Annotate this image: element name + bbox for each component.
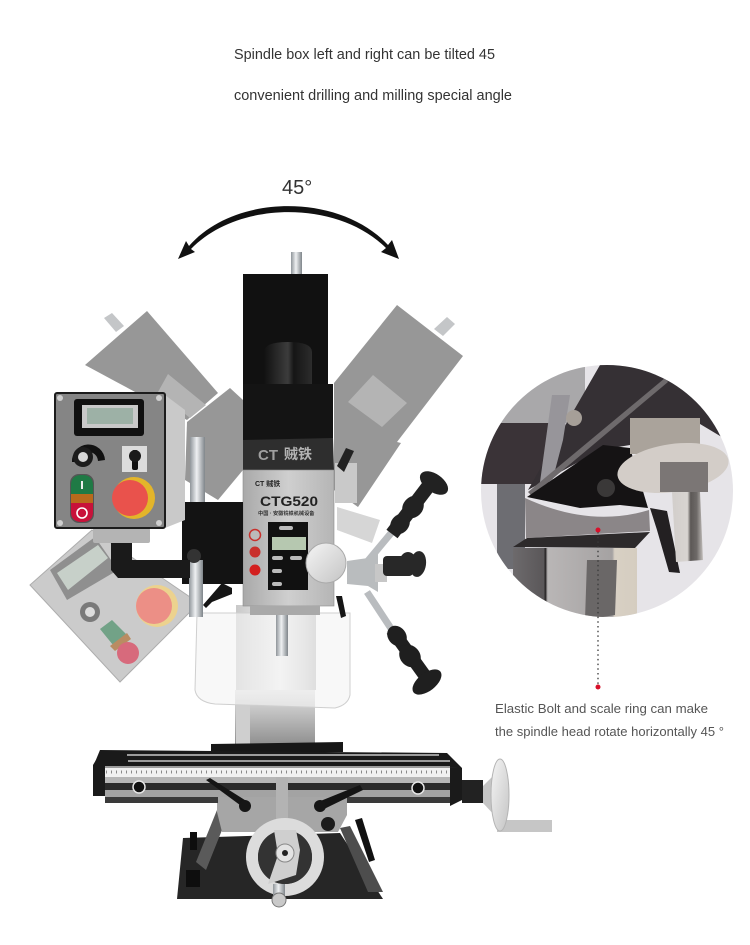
- display bezel: [74, 399, 144, 436]
- box corner screws: [57, 395, 162, 526]
- t slots: [105, 754, 450, 768]
- saddle: [217, 797, 347, 832]
- ghost control box tilted: [30, 530, 192, 682]
- saddle bolt: [321, 817, 335, 831]
- left lever knob: [239, 800, 251, 812]
- heading text: [234, 47, 512, 104]
- left end cap: [93, 752, 105, 796]
- left column strip: [497, 484, 525, 569]
- table stop bolts: [133, 781, 424, 794]
- cross table and base: [93, 742, 552, 907]
- glossy cylinder: [264, 342, 312, 384]
- dark recess: [527, 445, 648, 508]
- table top block: [211, 742, 343, 752]
- table front groove: [105, 783, 450, 790]
- display screen: [87, 408, 133, 424]
- caption line 1: Elastic Bolt and scale ring can make: [495, 701, 708, 716]
- spindle tool: [276, 615, 288, 656]
- logo text: 贼铁: [284, 446, 312, 462]
- start stop button: [70, 474, 94, 523]
- plate bottom collar: [250, 606, 320, 615]
- ghost orange button: [110, 633, 131, 651]
- diagonal light edge: [528, 378, 668, 496]
- silver head clamp: [335, 463, 357, 503]
- ghost left cylinder: [158, 374, 206, 418]
- left locking lever: [206, 778, 248, 808]
- model subtitle: 中国 · 安徽铣铁机械设备: [258, 509, 315, 517]
- side shaft: [462, 780, 483, 803]
- model name: CTG520: [260, 494, 318, 509]
- column scale strip: [236, 700, 250, 745]
- right lever knob: [314, 800, 326, 812]
- circular detail photo: [480, 365, 735, 620]
- dark head body: [528, 365, 735, 490]
- spindle collar: [630, 418, 700, 454]
- warning icons: [250, 530, 260, 576]
- hex bolt: [566, 410, 582, 426]
- ghost left top rod: [104, 313, 124, 332]
- base plate: [177, 833, 383, 899]
- left dovetail: [196, 810, 226, 870]
- table bottom: [105, 797, 218, 803]
- angle label 45 degrees: 45°: [282, 177, 312, 199]
- vertical side rod lower: [189, 560, 203, 617]
- ghost right cylinder: [348, 375, 407, 427]
- scale disc: [617, 443, 728, 493]
- middle handle: [383, 550, 428, 578]
- dotted leader: [597, 532, 599, 684]
- right dovetail: [340, 826, 383, 892]
- lower black housing: [243, 384, 333, 440]
- upper light strip: [501, 367, 585, 423]
- left base bolts: [186, 832, 200, 887]
- right small lever: [337, 448, 354, 472]
- display frame: [82, 405, 138, 428]
- arrow: curved double-headed tilt arrow: [178, 206, 399, 259]
- ghost green button: [100, 620, 126, 645]
- logo text: CT: [258, 447, 278, 464]
- photo background: [480, 365, 734, 618]
- control box side: [165, 395, 185, 528]
- right end cap: [450, 768, 462, 806]
- lock lever: [650, 508, 680, 573]
- ghost box body: [30, 530, 192, 682]
- curved scale block: [525, 498, 650, 538]
- side rod knob: [187, 549, 201, 563]
- digital panel screen: [272, 537, 306, 550]
- vertical side rod upper: [190, 437, 205, 502]
- upper lever arm: [367, 532, 392, 562]
- table bottom right: [347, 797, 450, 803]
- top red dot: [596, 528, 600, 532]
- ghost spindle head tilted left: [85, 311, 243, 500]
- dark upper left wall: [480, 423, 552, 484]
- lower handle: [383, 622, 446, 700]
- ghost red button: [117, 642, 139, 664]
- table center bracket: [276, 777, 288, 826]
- right locking lever: [318, 785, 363, 810]
- control box swivel base: [93, 528, 150, 543]
- lever under plate left: [203, 583, 232, 608]
- stainless control plate: [243, 470, 334, 606]
- ghost display screen: [57, 545, 108, 590]
- bottom red dot: [596, 684, 600, 690]
- heading line 2: convenient drilling and milling special angle: [234, 88, 512, 104]
- ghost side lever: [337, 507, 380, 543]
- heading line 1: Spindle box left and right can be tilted 45: [234, 47, 495, 63]
- column upper: [236, 605, 316, 690]
- small plate logo: CT 贼铁: [255, 479, 280, 488]
- steel column: [513, 548, 637, 620]
- ghost emergency stop: [136, 585, 178, 627]
- control box arm: [111, 543, 190, 578]
- control box: [55, 393, 165, 528]
- upper black housing: [243, 274, 328, 384]
- front handwheel: [252, 824, 318, 907]
- ghost dial: [80, 602, 100, 622]
- callout leader from photo to caption: [596, 528, 600, 690]
- table top surface: [93, 750, 462, 768]
- ghost right upper housing: [334, 305, 463, 507]
- transparent chuck guard: [195, 613, 350, 708]
- table front lower: [105, 790, 450, 797]
- upper handle: [386, 466, 452, 538]
- ghost spindle head tilted right: [334, 305, 463, 507]
- lower lever arm: [367, 592, 392, 630]
- hand lever hub: [306, 466, 452, 700]
- ghost left lower housing: [185, 388, 243, 500]
- column dark blob: [585, 560, 617, 620]
- logo text: [258, 446, 312, 464]
- round silver knob: [306, 543, 346, 583]
- ghost dial centre: [85, 607, 95, 617]
- selector switch: [122, 446, 147, 472]
- dovetail side bracket: [182, 502, 243, 584]
- digital panel: [268, 522, 308, 590]
- ghost left upper housing: [85, 311, 218, 420]
- spindle nose upper: [660, 462, 708, 492]
- box face: [55, 393, 165, 528]
- table front upper: [105, 777, 450, 783]
- logo band: [243, 438, 334, 470]
- recess bolt: [597, 479, 615, 497]
- milling machine: [55, 252, 452, 745]
- side handwheel: [483, 759, 552, 832]
- top rod: [291, 252, 302, 275]
- lever under plate right: [336, 596, 346, 618]
- hub: [347, 552, 378, 592]
- speed dial: [72, 444, 105, 467]
- digital panel buttons: [272, 526, 302, 586]
- hub nut: [375, 564, 387, 582]
- ghost right top rod: [434, 317, 455, 336]
- bracket: [540, 395, 570, 482]
- caption line 2: the spindle head rotate horizontally 45 °: [495, 724, 724, 739]
- spindle taper: [672, 492, 703, 562]
- emergency stop: [112, 477, 155, 519]
- table scale band: [105, 768, 450, 777]
- table scale ticks: [106, 770, 449, 774]
- column lower: [235, 690, 315, 745]
- ghost display: [50, 537, 118, 600]
- callout caption: [495, 701, 724, 739]
- right clamp lever: [355, 818, 375, 862]
- block shadow: [513, 532, 650, 548]
